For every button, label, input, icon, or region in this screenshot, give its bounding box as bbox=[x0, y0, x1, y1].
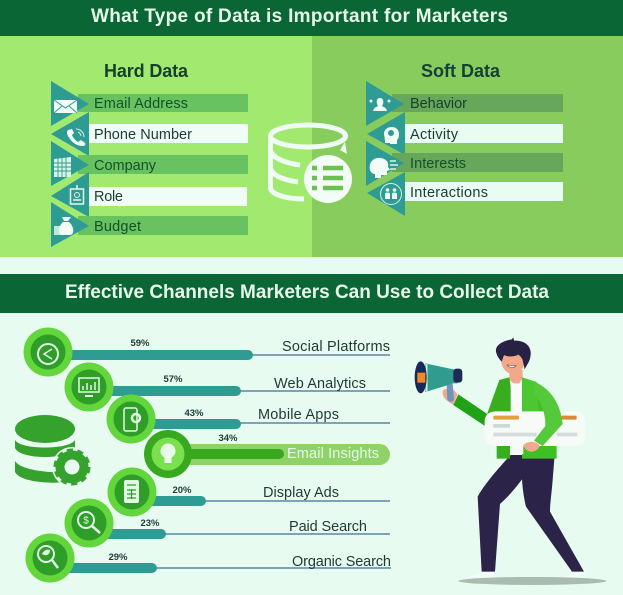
row: role: Role bbox=[94, 189, 123, 205]
channel: mobile apps 43% bbox=[106, 394, 390, 444]
row: activity bbox=[367, 112, 563, 155]
channel: organic search 29% bbox=[26, 534, 391, 582]
row: budget bbox=[51, 202, 248, 247]
row: phone number: Phone Number bbox=[94, 127, 192, 143]
panel: soft data bbox=[312, 36, 623, 257]
channel: email insights 34%: Email Insights bbox=[287, 446, 379, 462]
row: behavior bbox=[366, 81, 563, 126]
icon: central database bbox=[270, 125, 352, 203]
channel: social platforms 59%: Social Platforms bbox=[282, 339, 390, 355]
row: role bbox=[51, 172, 247, 217]
channel: organic search 29%: Organic Search bbox=[292, 554, 391, 570]
card bbox=[485, 411, 585, 454]
panel: hard data bbox=[0, 36, 312, 257]
row: email address: Email Address bbox=[94, 96, 188, 112]
channel: paid search 23% bbox=[64, 498, 390, 548]
heading: soft data: Soft Data bbox=[421, 61, 501, 81]
row: activity: Activity bbox=[410, 127, 459, 143]
hand on card bbox=[523, 442, 539, 452]
row: company: Company bbox=[94, 158, 157, 174]
channel: email insights 34%: 34% bbox=[218, 433, 238, 444]
ground shadow bbox=[458, 577, 606, 585]
header: top title: What Type of Data is Important for Marketers bbox=[91, 6, 508, 27]
channel: display ads 20% bbox=[108, 468, 390, 516]
channel: mobile apps 43%: 43% bbox=[184, 408, 204, 419]
row: interests: Interests bbox=[410, 156, 466, 172]
row: company bbox=[51, 141, 248, 186]
channel: organic search 29%: 29% bbox=[108, 552, 128, 563]
far arm bbox=[453, 394, 487, 426]
icon: database with gear bbox=[15, 415, 92, 487]
channel: display ads 20%: 20% bbox=[172, 485, 192, 496]
illustration: person with megaphone bbox=[415, 337, 606, 585]
header: channels title bbox=[0, 274, 623, 313]
channel: web analytics 57%: Web Analytics bbox=[274, 376, 366, 392]
channel: email insights 34% bbox=[144, 430, 390, 478]
jacket right bbox=[522, 377, 557, 459]
shirt bbox=[509, 383, 523, 455]
face bbox=[501, 351, 524, 374]
channel: mobile apps 43%: Mobile Apps bbox=[258, 407, 339, 423]
channel: web analytics 57% bbox=[64, 362, 390, 412]
channel: paid search 23%: $ bbox=[83, 516, 89, 526]
row: interactions bbox=[367, 172, 563, 216]
row: behavior: Behavior bbox=[410, 96, 467, 112]
channel: paid search 23%: 23% bbox=[140, 518, 160, 529]
row: interests bbox=[366, 141, 563, 186]
row: email address bbox=[51, 81, 248, 126]
row: interactions: Interactions bbox=[410, 185, 488, 201]
heading: hard data: Hard Data bbox=[104, 61, 189, 81]
neck bbox=[509, 370, 523, 387]
row: phone number bbox=[51, 112, 248, 156]
jacket left bbox=[487, 377, 511, 459]
header: top title bbox=[0, 0, 623, 36]
legs bbox=[478, 455, 584, 572]
hand and handle bbox=[443, 389, 457, 405]
channel: web analytics 57%: 57% bbox=[163, 374, 183, 385]
channel: social platforms 59% bbox=[24, 328, 390, 376]
row: budget: Budget bbox=[94, 219, 141, 235]
hair bbox=[496, 337, 531, 369]
jacket sleeve over card bbox=[533, 382, 563, 446]
header: channels title: Effective Channels Marketers Can Use to Collect Data bbox=[65, 282, 549, 303]
channel: paid search 23%: Paid Search bbox=[289, 519, 367, 535]
channel: display ads 20%: Display Ads bbox=[263, 485, 339, 501]
channel: social platforms 59%: 59% bbox=[130, 338, 150, 349]
megaphone bbox=[425, 363, 457, 392]
